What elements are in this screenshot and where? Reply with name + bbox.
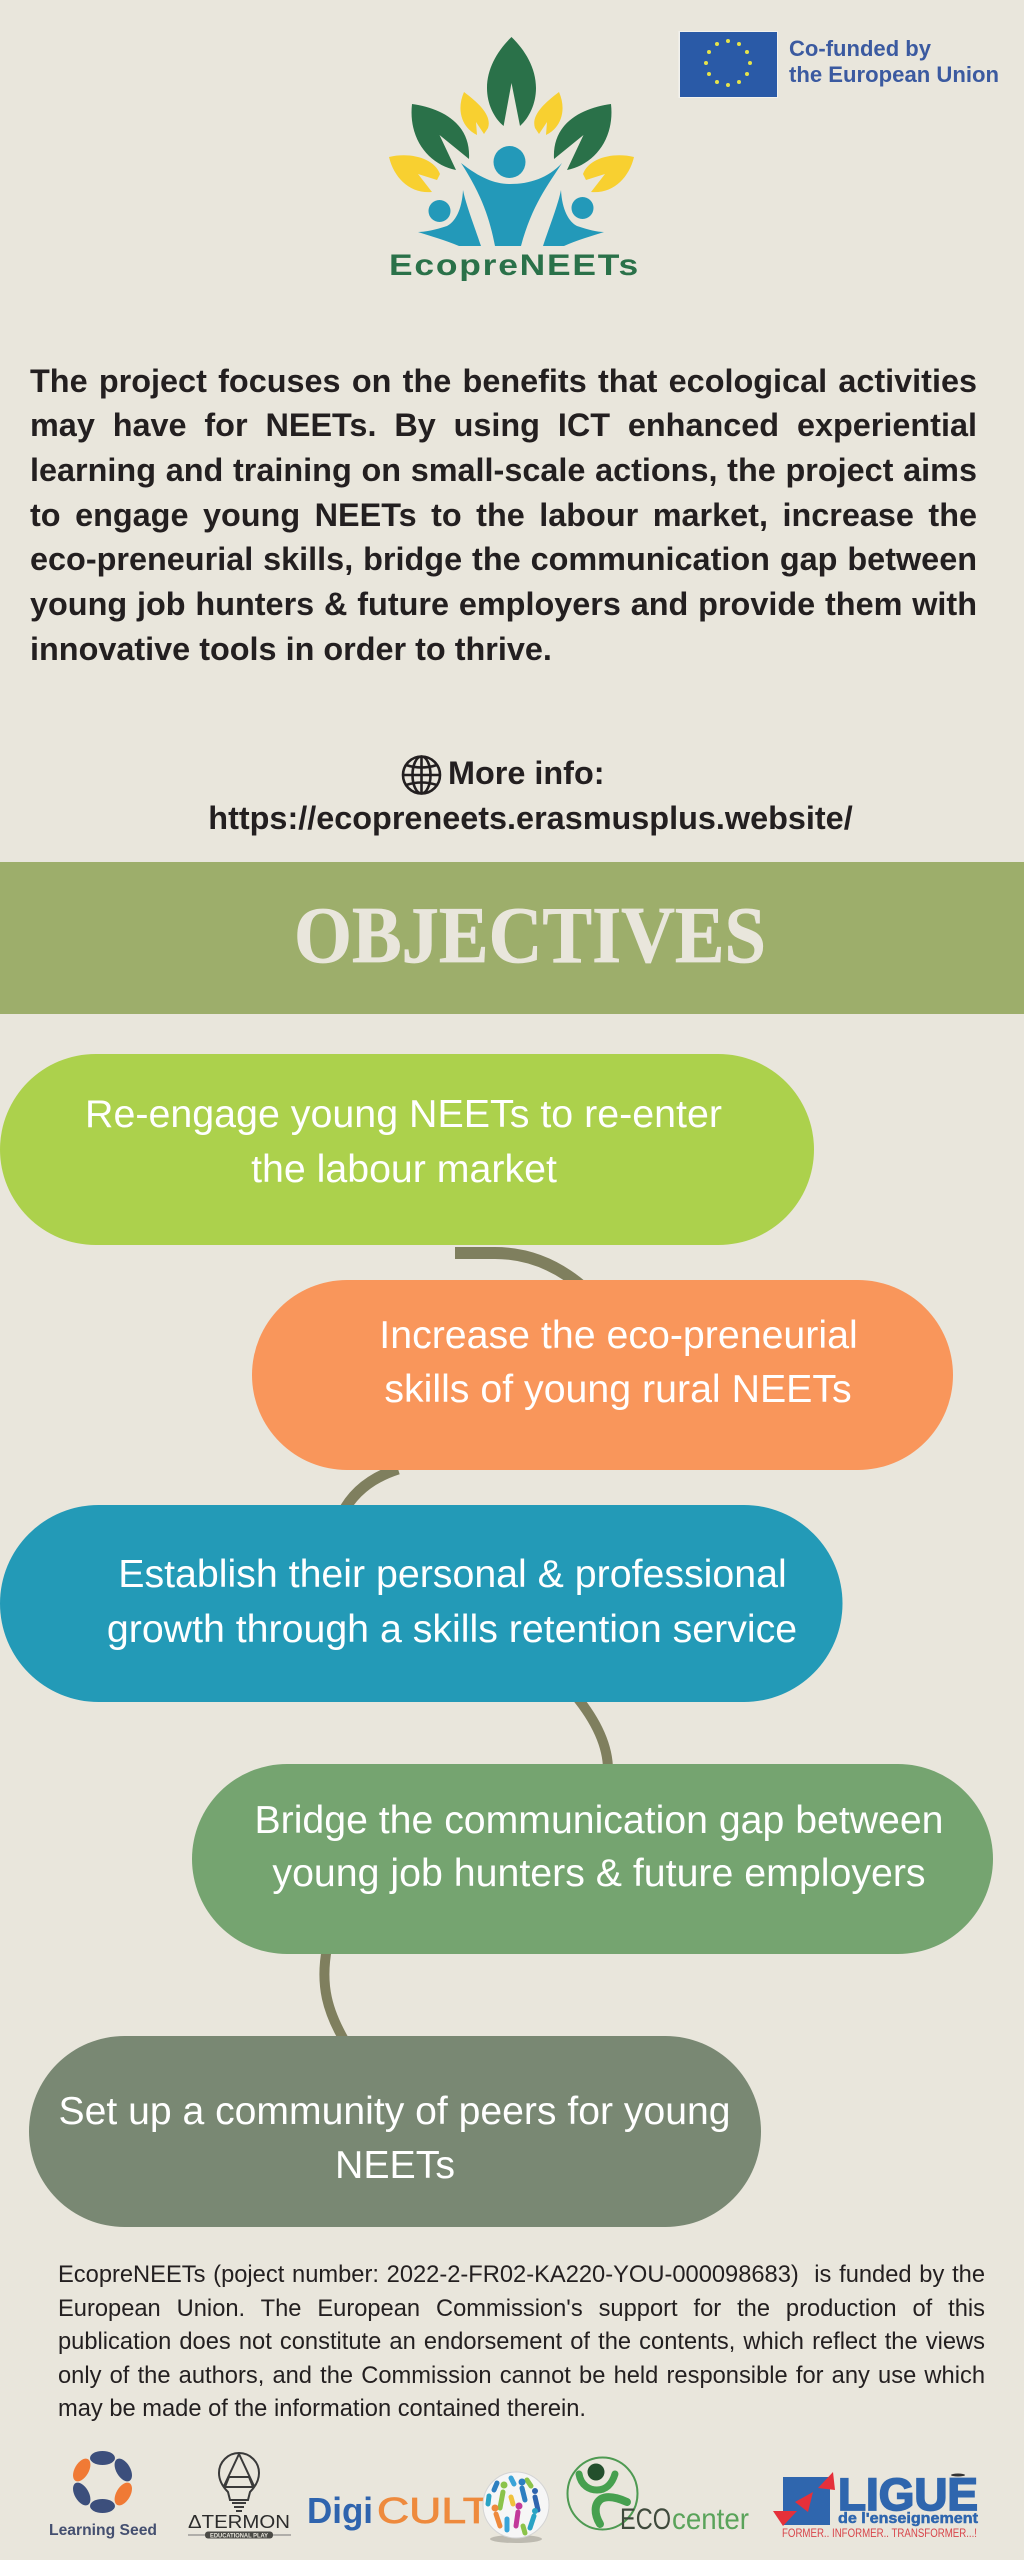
objectives banner (0, 862, 1024, 1014)
connector 3 to 4 (575, 1695, 608, 1770)
objective 1 (0, 1054, 814, 1245)
intro paragraph (30, 362, 977, 667)
funding disclaimer: European Union. The European Commission's support for the production of this (58, 2296, 985, 2322)
objective 3 (0, 1505, 842, 1702)
intro paragraph: learning and training on small-scale actions, the project aims (30, 452, 977, 488)
more info link (208, 755, 853, 836)
partner logo: DigiCULT (307, 2472, 549, 2543)
partner logo: Atermon: EDUCATIONAL PLAY (210, 2534, 268, 2540)
logo: co-funded by the European Union (678, 31, 999, 98)
objective 3: Establish their personal & professional (118, 1552, 787, 1596)
partner logo: DigiCULT: CULT (377, 2490, 490, 2531)
funding disclaimer: may be made of the information contained therein. (58, 2396, 586, 2422)
partner logo: Ligue de l'enseignement: FORMER.. INFORMER.. TRANSFORMER...! (782, 2526, 977, 2540)
intro paragraph: innovative tools in order to thrive. (30, 631, 552, 667)
objective 4 (192, 1764, 993, 1954)
objective 2: Increase the eco-preneurial (379, 1313, 858, 1357)
objective 1: Re-engage young NEETs to re-enter (85, 1092, 722, 1136)
funding disclaimer: EcopreNEETs (poject number: 2022-2-FR02-KA220-YOU-000098683) is funded by the (58, 2262, 985, 2288)
objective 4: young job hunters & future employers (272, 1851, 926, 1895)
logo: EcopreNEETs (389, 37, 640, 282)
objective 3: growth through a skills retention service (107, 1607, 797, 1651)
logo: EcopreNEETs: EcopreNEETs (389, 249, 640, 282)
logo: co-funded by the European Union: the European Union (789, 62, 999, 87)
objective 5 (29, 2036, 761, 2227)
objective 4: Bridge the communication gap between (254, 1798, 944, 1842)
partner logo: Ligue de l'enseignement: de l'enseignement (838, 2510, 978, 2527)
connector 4 to 5 (324, 1948, 347, 2045)
partner logo: Ligue de l'enseignement (773, 2469, 978, 2540)
partner logo: DigiCULT: Digi (307, 2490, 373, 2531)
more info link: https://ecopreneets.erasmusplus.website/ (208, 800, 853, 836)
objective 5: NEETs (335, 2143, 455, 2187)
connector 2 to 3 (342, 1469, 398, 1514)
intro paragraph: to engage young NEETs to the labour market, increase the (30, 497, 977, 533)
partner logo: Atermon: ΔTERMON (188, 2512, 290, 2532)
intro paragraph: may have for NEETs. By using ICT enhanced experiential (30, 407, 977, 443)
funding disclaimer: only of the authors, and the Commission cannot be held responsible for any use which (58, 2362, 985, 2388)
logo: co-funded by the European Union: Co-funded by (789, 36, 932, 61)
partner logo: ECOcenter (568, 2458, 749, 2536)
intro paragraph: The project focuses on the benefits that ecological activities (30, 362, 977, 398)
partner logo: ECOcenter: ECO (620, 2503, 671, 2536)
partner logo: Atermon (188, 2453, 291, 2540)
more info link: More info: (448, 755, 605, 791)
objectives banner: OBJECTIVES (294, 892, 766, 980)
icon: globe (403, 756, 440, 794)
objective 1: the labour market (251, 1147, 557, 1191)
objective 2 (252, 1280, 953, 1470)
partner logo: Ligue de l'enseignement: LIGUE (838, 2469, 978, 2520)
objective 2: skills of young rural NEETs (384, 1367, 852, 1411)
connector 1 to 2 (455, 1253, 586, 1290)
intro paragraph: eco-preneurial skills, bridge the communication gap between (30, 541, 977, 577)
funding disclaimer: publication does not constitute an endorsement of the contents, which reflect the views (58, 2329, 985, 2355)
partner logo: Learning Seed (49, 2451, 157, 2539)
partner logo: Learning Seed: Learning Seed (49, 2522, 157, 2539)
funding disclaimer (58, 2262, 985, 2422)
intro paragraph: young job hunters & future employers and provide them with (30, 586, 977, 622)
objective 5: Set up a community of peers for young (58, 2089, 730, 2133)
partner logo: ECOcenter: center (672, 2503, 749, 2536)
